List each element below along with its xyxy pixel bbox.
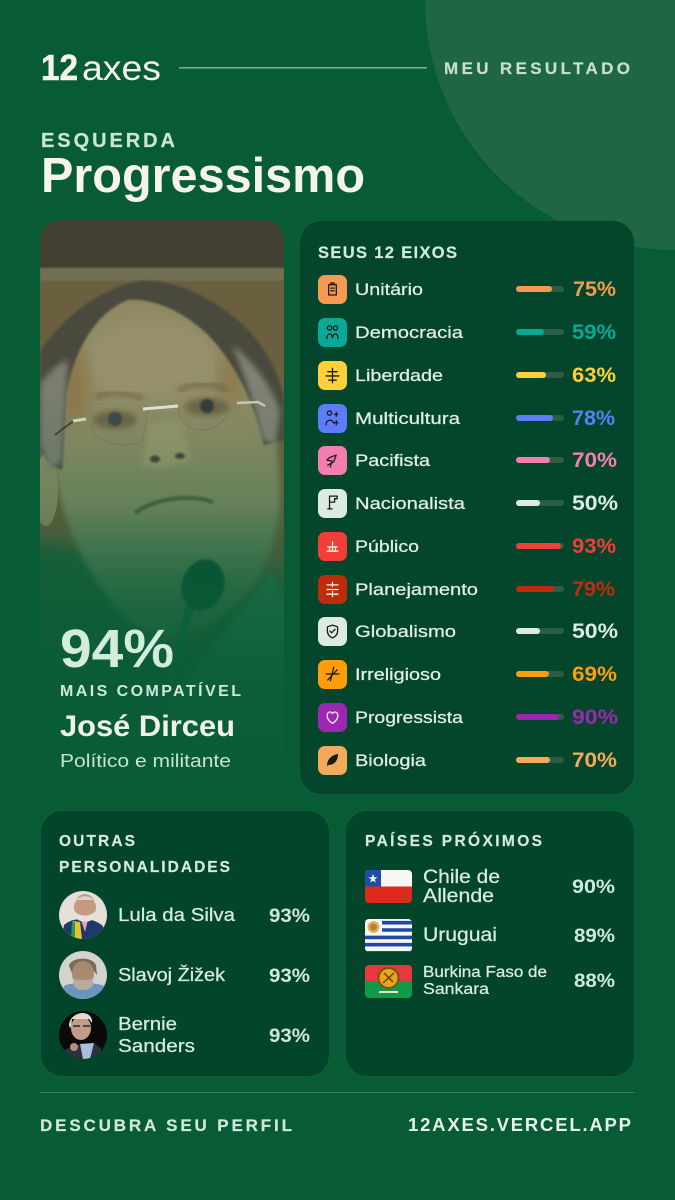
flag: Chile (365, 870, 412, 903)
axis: Globalismo: 50% (572, 620, 618, 643)
person: Slavoj Žižek: Slavoj Žižek (118, 965, 226, 985)
axis: Planejamento: Planejamento (355, 580, 478, 599)
panel: main match photo (40, 220, 284, 795)
axis: Globalismo: Globalismo (355, 622, 456, 641)
title block (41, 130, 365, 203)
panel: outras personalidades (40, 810, 330, 1076)
axis: Planejamento: 79% (572, 578, 615, 601)
axis: Público: 93% (572, 535, 616, 558)
name lines: Allende (423, 886, 494, 907)
axis: Nacionalista (318, 489, 618, 518)
axis: Biologia: 70% (572, 749, 617, 772)
country: Burkina Faso de Sankara (365, 964, 615, 998)
mouth (135, 498, 213, 513)
eyes (93, 411, 137, 429)
shoulders (40, 532, 284, 795)
logo (41, 47, 161, 88)
country: Chile de Allende: 90% (572, 877, 615, 898)
axis: Biologia: Biologia (355, 751, 427, 770)
axis: Planejamento (318, 575, 615, 604)
person: Lula da Silva: 93% (269, 906, 310, 927)
panel heading: SEUS 12 EIXOS (318, 244, 457, 262)
name lines: Burkina Faso de (423, 964, 547, 981)
compatibility label: MAIS COMPATÍVEL (60, 681, 241, 700)
axis: Democracia: 59% (572, 321, 616, 344)
axis: Nacionalista: Nacionalista (355, 494, 466, 513)
axis: Liberdade (318, 361, 616, 390)
axis: Progressista: 90% (572, 706, 618, 729)
axis: Público (318, 532, 616, 561)
axis: Irreligioso (318, 660, 617, 689)
axis: Unitário: 75% (573, 278, 616, 301)
panel heading: OUTRAS (59, 833, 135, 850)
avatar (59, 1011, 107, 1059)
axis: Liberdade: 63% (572, 364, 616, 387)
ear (40, 455, 58, 526)
name lines: Sanders (118, 1036, 195, 1056)
axis: Pacifista (318, 446, 617, 475)
call to action: DESCUBRA SEU PERFIL (40, 1116, 292, 1135)
name lines: Sankara (423, 981, 489, 998)
avatar (59, 891, 107, 939)
axis: Irreligioso: Irreligioso (355, 665, 441, 684)
person: Slavoj Žižek (59, 951, 310, 999)
axis: Unitário (318, 275, 616, 304)
axis: Globalismo (318, 617, 618, 646)
axis: Pacifista: 70% (572, 449, 617, 472)
axis: Progressista (318, 703, 618, 732)
category: ESQUERDA (41, 130, 175, 152)
panel heading (59, 833, 230, 876)
microphone (175, 604, 194, 644)
header label: MEU RESULTADO (444, 59, 630, 78)
person: Bernie Sanders: 93% (269, 1026, 310, 1047)
name lines: Bernie (118, 1014, 177, 1034)
brows (95, 393, 143, 399)
country: Chile de Allende (365, 868, 614, 903)
nose (144, 423, 190, 468)
main title: Progressismo (41, 149, 365, 203)
axis: Liberdade: Liberdade (355, 366, 443, 385)
axis: Multicultura: Multicultura (355, 409, 461, 428)
country: Uruguai (365, 919, 615, 952)
axis: Multicultura (318, 404, 615, 433)
fade overlay (40, 418, 284, 795)
axis: Biologia (318, 746, 617, 775)
name lines (423, 964, 547, 998)
hair (40, 281, 284, 470)
header (41, 47, 630, 88)
country: Uruguai: 89% (574, 926, 615, 947)
axis: Nacionalista: 50% (572, 492, 618, 515)
axis: Democracia: Democracia (355, 323, 464, 342)
face (50, 288, 280, 635)
axis: Irreligioso: 69% (572, 663, 617, 686)
footer (40, 1114, 631, 1135)
country: Uruguai: Uruguai (423, 925, 497, 946)
compatibility score: 94% (60, 619, 174, 679)
axis: Progressista: Progressista (355, 708, 464, 727)
axis: Multicultura: 78% (572, 407, 615, 430)
axis: Pacifista: Pacifista (355, 451, 431, 470)
country: Burkina Faso de Sankara: 88% (574, 971, 615, 992)
logo: 12 (41, 47, 78, 88)
name lines: Chile de (423, 867, 500, 888)
person: Lula da Silva: Lula da Silva (118, 905, 236, 925)
logo: axes (82, 49, 161, 88)
name lines (118, 1014, 195, 1056)
axis: Unitário: Unitário (355, 280, 423, 299)
flag: Burkina Faso (365, 965, 412, 998)
panel: países próximos (346, 810, 634, 1076)
panel heading: PAÍSES PRÓXIMOS (365, 832, 542, 850)
glasses (143, 406, 178, 409)
person role: Político e militante (60, 750, 231, 771)
person: Bernie Sanders (59, 1011, 310, 1059)
name lines (423, 867, 500, 907)
panel heading: PERSONALIDADES (59, 859, 230, 876)
decorative corner circle (425, 0, 675, 250)
avatar (59, 951, 107, 999)
site address: 12AXES.VERCEL.APP (408, 1114, 631, 1135)
person: Slavoj Žižek: 93% (269, 966, 310, 987)
person: Lula da Silva (59, 891, 310, 939)
photo of José Dirceu (40, 220, 284, 795)
panel: seus 12 eixos (300, 220, 634, 794)
axis: Público: Público (355, 537, 419, 556)
axis: Democracia (318, 318, 616, 347)
person name: José Dirceu (60, 710, 235, 743)
flag: Uruguay (365, 919, 412, 952)
